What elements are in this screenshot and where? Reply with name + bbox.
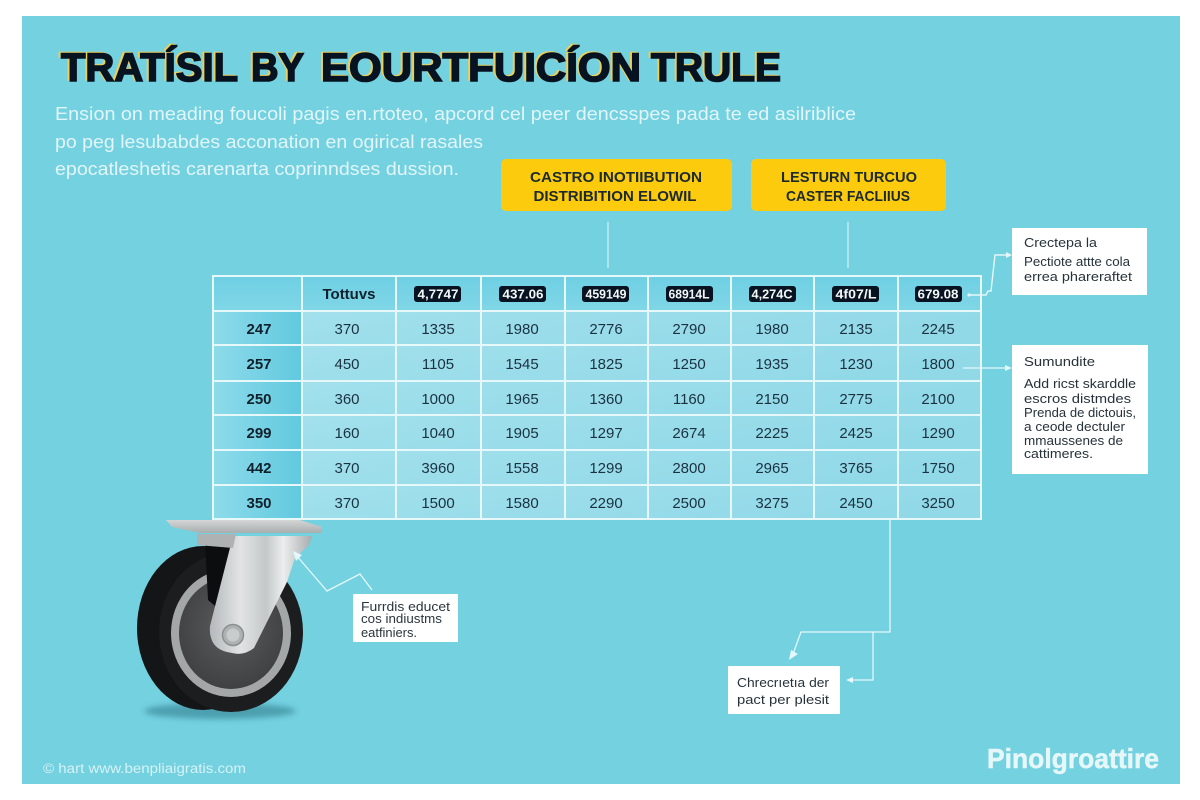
table values: 1980 [505, 321, 539, 338]
mounting plate [166, 520, 322, 533]
table values: 2135 [839, 321, 873, 338]
title: EOURTFUICÍON [321, 45, 641, 90]
arrows: table to bottom callout [789, 520, 890, 683]
axle bolt [222, 624, 244, 646]
wheel tyre [137, 546, 269, 710]
table row labels: 250 [246, 391, 272, 408]
callout: top right: Crectepa la [1024, 235, 1098, 250]
yellow label: caster: CASTER FACLIIUS [786, 188, 910, 205]
table values: 2450 [839, 495, 873, 512]
table values: 3250 [921, 495, 955, 512]
callout: top right [1012, 228, 1147, 295]
callout: summary: escros distmdes [1024, 391, 1132, 406]
table row labels [246, 321, 272, 512]
connector: labels to table [608, 222, 848, 268]
table values: 2800 [672, 460, 706, 477]
table header row: 68914L [668, 288, 710, 302]
yellow label: caster: LESTURN TURCUO [781, 169, 917, 186]
table values: 2100 [921, 391, 955, 408]
table values: 1290 [921, 425, 955, 442]
title: BY [251, 46, 304, 90]
table values: 1558 [505, 460, 539, 477]
table values: 1299 [589, 460, 623, 477]
yellow label: distribution: DISTRIBITION ELOWIL [534, 188, 696, 205]
table header row: Tottuvs [322, 287, 376, 303]
wheel shadow [144, 703, 296, 719]
intro text block [55, 103, 856, 179]
title: TRATÍSIL [59, 44, 236, 89]
table values: 1335 [421, 321, 455, 338]
table values: 1580 [505, 495, 539, 512]
table values: 370 [334, 460, 360, 477]
table header row: 4,7747 [418, 288, 459, 302]
footer brand: Pinolgroattire [987, 743, 1159, 774]
bracket shadow [205, 540, 234, 612]
table values: 2776 [589, 321, 623, 338]
table values: 1230 [839, 356, 873, 373]
callout: wheel note [353, 594, 458, 642]
intro text block: epocatleshetis carenarta coprinndses dussion. [55, 158, 459, 179]
title: BY [249, 45, 302, 89]
table values: 3275 [755, 495, 789, 512]
table values: 450 [334, 356, 360, 373]
title: TRATÍSIL [61, 45, 238, 90]
callout: summary: cattimeres. [1024, 446, 1093, 461]
yellow label: caster [751, 159, 946, 211]
callout: top right: Pectiote attte cola [1024, 254, 1131, 269]
table values: 1800 [921, 356, 955, 373]
table row labels: 350 [246, 495, 272, 512]
table values: 1965 [505, 391, 539, 408]
table values: 2225 [755, 425, 789, 442]
callout: summary: Add ricst skarddle [1024, 376, 1136, 391]
table values: 1500 [421, 495, 455, 512]
table header row: 437.06 [502, 288, 544, 302]
callout: wheel note: Furrdis educet [361, 600, 451, 614]
table row labels: 442 [246, 460, 272, 477]
intro text block: po peg lesubabdes acconation en ogirical rasales [55, 131, 483, 152]
icon: swivel caster wheel [137, 520, 322, 719]
arrow: header to top callout [967, 252, 1012, 297]
table values: 2425 [839, 425, 873, 442]
table header row: 4,274C [752, 288, 792, 302]
callout: wheel note: eatfiniers. [361, 626, 417, 640]
table values: 1935 [755, 356, 789, 373]
table values: 160 [334, 425, 360, 442]
table header row: 4f07/L [836, 288, 877, 302]
callout: wheel note: cos indiustms [361, 612, 442, 626]
footer credit: © hart www.benpliaigratis.com [43, 761, 246, 776]
title: TRULE [651, 46, 781, 90]
table header row [322, 286, 962, 303]
yellow label: distribution: CASTRO INOTIIBUTION [530, 169, 702, 186]
yellow label: distribution [501, 159, 732, 211]
caster bracket [210, 536, 312, 654]
table values: 2245 [921, 321, 955, 338]
callout: top right: errea phareraftet [1024, 269, 1132, 284]
callout: summary: a ceode dectuler [1024, 419, 1126, 434]
callout: summary [1012, 345, 1148, 474]
arrow: table to summary [963, 365, 1012, 371]
table values: 1980 [755, 321, 789, 338]
table values: 1905 [505, 425, 539, 442]
table values: 2965 [755, 460, 789, 477]
wheel rim [171, 569, 291, 697]
table values: 3765 [839, 460, 873, 477]
intro text block: Ension on meading foucoli pagis en.rtoteo, apcord cel peer dencsspes pada te ed asilriblice [55, 103, 856, 124]
table values: 2290 [589, 495, 623, 512]
table values: 1297 [589, 425, 623, 442]
table row labels: 299 [246, 425, 272, 442]
table values: 2775 [839, 391, 873, 408]
table values: 370 [334, 495, 360, 512]
table values: 1160 [673, 391, 705, 408]
data table [212, 275, 982, 520]
table row labels: 257 [246, 356, 272, 373]
table values: 360 [334, 391, 360, 408]
callout: summary: Prenda de dictouis, [1024, 405, 1136, 420]
table values: 1040 [421, 425, 455, 442]
table values: 3960 [421, 460, 455, 477]
table values [334, 321, 955, 512]
table values: 1360 [589, 391, 623, 408]
arrow: wheel to callout [293, 551, 372, 591]
title [59, 44, 781, 90]
table header row: 679.08 [918, 288, 959, 302]
title: EOURTFUICÍON [319, 44, 639, 89]
callout: bottom [728, 666, 840, 714]
callout: bottom: Chrecrıetıa der [737, 675, 830, 690]
title: TRULE [649, 45, 779, 89]
table values: 2500 [672, 495, 706, 512]
table header row: 459149 [586, 288, 627, 302]
table values: 2150 [755, 391, 789, 408]
table values: 2790 [672, 321, 706, 338]
table values: 1000 [421, 391, 455, 408]
table values: 1105 [422, 356, 454, 373]
table values: 370 [334, 321, 360, 338]
callout: bottom: pact per plesit [737, 692, 829, 707]
table grid [212, 275, 982, 520]
table values: 1825 [589, 356, 623, 373]
table values: 1250 [672, 356, 706, 373]
table values: 2674 [672, 425, 706, 442]
table row labels: 247 [246, 321, 272, 338]
table values: 1750 [921, 460, 955, 477]
callout: summary: Sumundite [1024, 354, 1095, 369]
callout: summary: mmaussenes de [1024, 433, 1123, 448]
table values: 1545 [505, 356, 539, 373]
